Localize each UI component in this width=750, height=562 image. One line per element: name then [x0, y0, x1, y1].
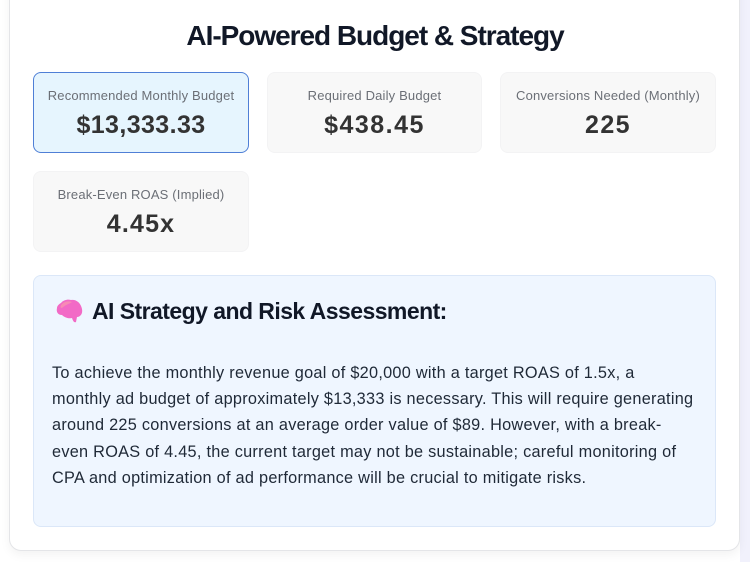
panel heading: AI Strategy and Risk Assessment: — [92, 298, 447, 324]
metric: required daily budget: Required Daily Budget — [308, 88, 441, 103]
metric: break-even ROAS — [33, 171, 249, 252]
panel: AI strategy and risk assessment — [33, 275, 716, 527]
metric: conversions needed — [500, 72, 716, 153]
metric: recommended monthly budget: $13,333.33 — [76, 111, 206, 139]
metric: break-even ROAS: Break-Even ROAS (Implied) — [58, 187, 224, 202]
strategy paragraph: monthly ad budget of approximately $13,333 is necessary. This will require generating — [52, 390, 693, 408]
metric: recommended monthly budget — [33, 72, 249, 153]
metric: conversions needed: Conversions Needed (Monthly) — [516, 88, 700, 103]
metric: required daily budget — [267, 72, 482, 153]
strategy paragraph: CPA and optimization of ad performance will be crucial to mitigate risks. — [52, 469, 586, 487]
metric: conversions needed: 225 — [585, 111, 631, 139]
icon: brain — [56, 300, 82, 322]
strategy paragraph: around 225 conversions at an average order value of $89. However, with a break- — [52, 416, 662, 434]
strategy paragraph: To achieve the monthly revenue goal of $20,000 with a target ROAS of 1.5x, a — [52, 364, 635, 382]
metric: break-even ROAS: 4.45x — [107, 210, 175, 238]
strategy paragraph — [52, 364, 693, 487]
strategy paragraph: even ROAS of 4.45, the current target may not be sustainable; careful monitoring of — [52, 443, 676, 461]
title: AI-Powered Budget & Strategy — [186, 20, 564, 51]
metric: recommended monthly budget: Recommended Monthly Budget — [48, 88, 234, 103]
metric: required daily budget: $438.45 — [324, 111, 425, 139]
